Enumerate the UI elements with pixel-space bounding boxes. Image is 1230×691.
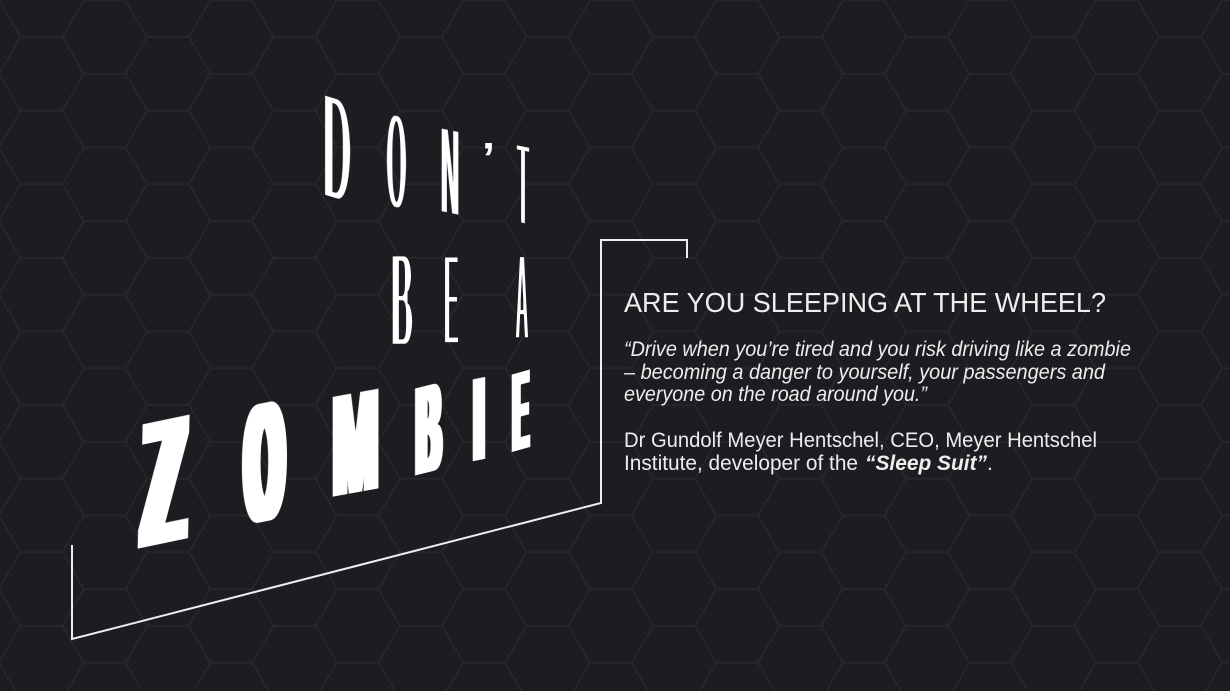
title line: BE A [392, 220, 529, 380]
title line: BE A: B [392, 220, 413, 380]
title line: DON'T: O [387, 79, 406, 246]
title line: ZOMBIE: M [333, 359, 378, 528]
attribution: Dr Gundolf Meyer Hentschel, CEO, Meyer Hentschel [624, 429, 1097, 452]
title: Don't be a zombie [144, 55, 529, 586]
attribution: Institute, developer of the [624, 452, 858, 475]
title line: BE A: E [444, 223, 458, 378]
title line: ZOMBIE [144, 348, 528, 586]
title line: ZOMBIE: I [475, 353, 483, 487]
attribution [624, 429, 1097, 475]
title line: BE A: A [516, 223, 529, 370]
frame line [72, 240, 687, 639]
right column text [623, 287, 1131, 475]
quote [623, 338, 1131, 406]
attribution: . [987, 452, 993, 475]
title line: DON'T: N [441, 93, 459, 249]
quote: “Drive when you’re tired and you risk driving like a zombie [624, 338, 1131, 361]
title line: DON'T: T [517, 114, 529, 256]
quote: – becoming a danger to yourself, your passengers and [623, 361, 1106, 384]
title line: ZOMBIE: Z [144, 377, 185, 586]
title line: ZOMBIE: O [246, 366, 283, 560]
title line: DON'T: D [324, 55, 351, 245]
title line: ZOMBIE: B [417, 354, 441, 502]
attribution: “Sleep Suit” [865, 452, 987, 475]
title line: DON'T: ’ [482, 133, 495, 183]
heading: ARE YOU SLEEPING AT THE WHEEL? [624, 287, 1106, 318]
title line: DON'T [324, 55, 529, 256]
quote: everyone on the road around you.” [624, 383, 928, 406]
title line: ZOMBIE: E [513, 348, 528, 477]
